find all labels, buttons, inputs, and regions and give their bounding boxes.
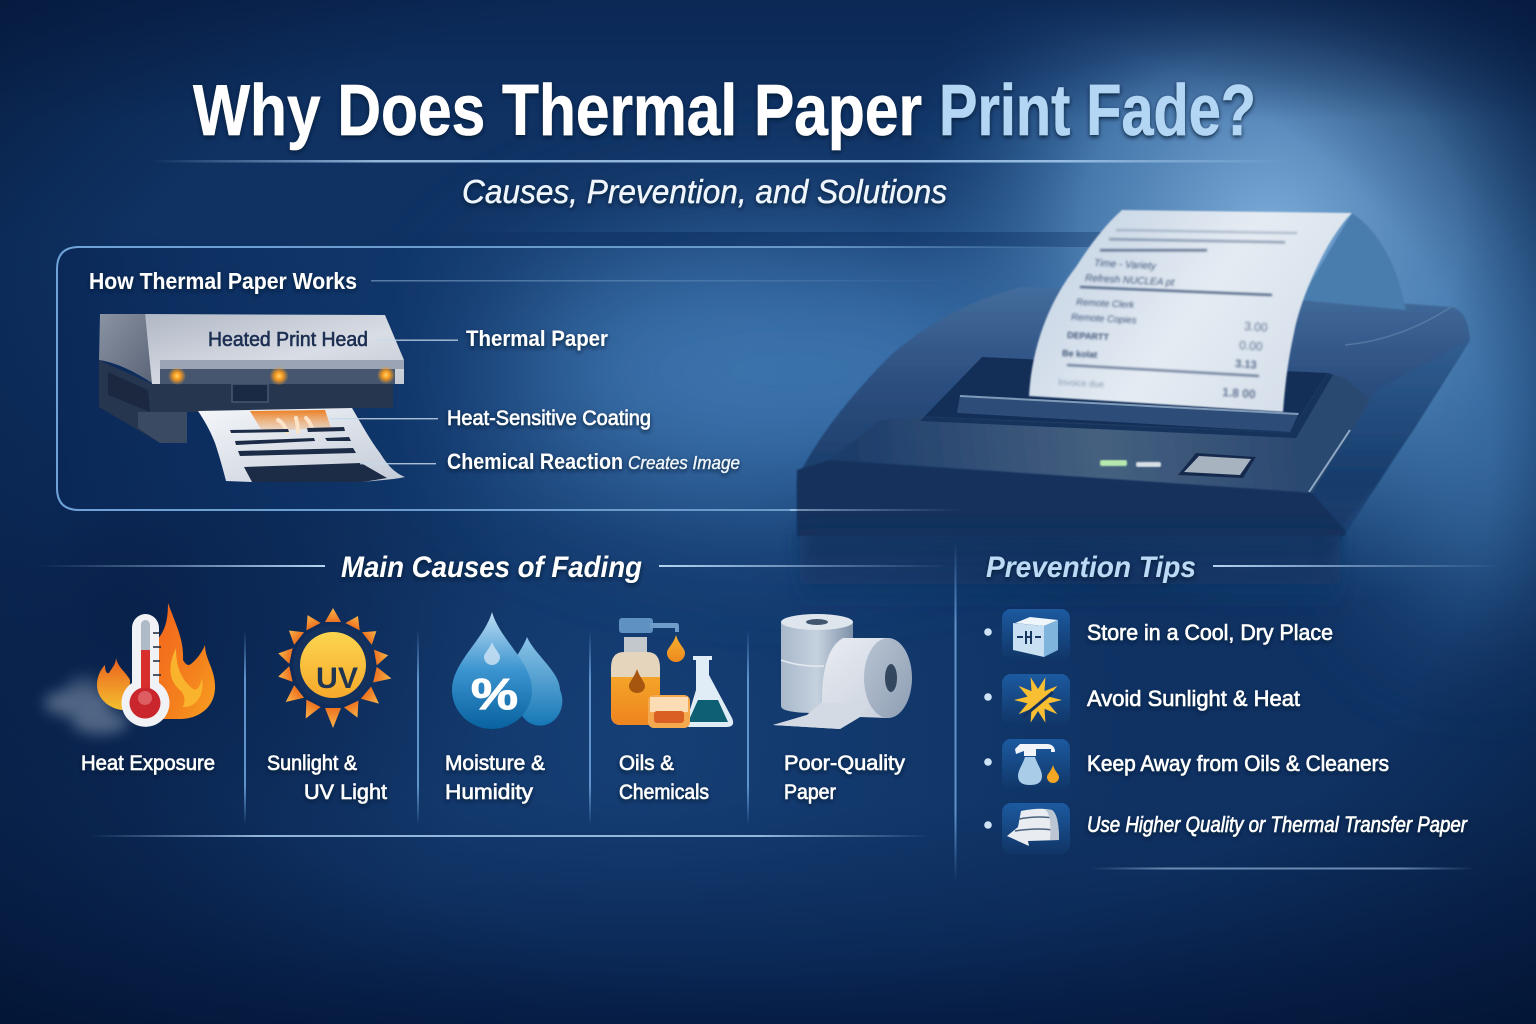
section divider (954, 540, 956, 880)
icon: back roll (781, 622, 853, 713)
receipt printed content: Refresh NUCLEA pt (1085, 273, 1176, 289)
printed lines (230, 427, 387, 482)
heading: how thermal paper works: How Thermal Paper Works (89, 268, 357, 294)
tips bottom rule (1090, 868, 1475, 870)
cause: oils and chemicals: Chemicals (619, 781, 709, 804)
label: Oils & (619, 752, 674, 775)
printer body back (797, 287, 1470, 530)
label: Moisture & (445, 752, 545, 775)
printed paper (198, 408, 405, 482)
panel: how thermal paper works frame (57, 247, 1075, 510)
label: heated print head: Heated Print Head (208, 329, 368, 351)
tip: use higher quality paper (984, 803, 1468, 854)
cause: oils and chemicals (611, 618, 733, 804)
receipt printed content (1058, 229, 1297, 401)
title: Why Does Thermal Paper (193, 71, 922, 151)
receipt printed content: Remote Clerk (1076, 297, 1136, 311)
callout: heat-sensitive coating: Heat-Sensitive Coating (447, 407, 651, 430)
tip: store cool and dry (984, 609, 1333, 661)
icon: uv sun (277, 608, 393, 728)
receipt printed content: 3.00 (1244, 319, 1268, 335)
icon: pump bottle (619, 618, 653, 633)
receipt printed content: Remote Copies (1071, 312, 1137, 326)
printer top surface (830, 373, 1370, 493)
receipt printed content: Time - Variety (1094, 258, 1157, 272)
tip: keep away from oils and cleaners (984, 739, 1389, 791)
printer right lid line (1345, 307, 1451, 345)
icon: paper stack (1002, 803, 1070, 854)
printer front face fade (800, 530, 1340, 610)
icon: water drops (509, 637, 562, 726)
label: Poor-Quality (784, 752, 906, 775)
receipt printed content: DEPARTT (1067, 330, 1110, 342)
icon: flame (157, 603, 215, 719)
receipt printed content: 1.8 00 (1222, 385, 1256, 401)
cause: poor-quality paper: Paper (784, 781, 836, 804)
label: Heat Exposure (81, 752, 215, 775)
icon: smoke (44, 676, 128, 734)
callout: chemical reaction (360, 449, 740, 474)
receipt printed content: Invoice due (1058, 377, 1104, 389)
title: Print Fade? (939, 71, 1256, 151)
receipt roll back (1300, 213, 1406, 310)
printer right side (1312, 340, 1470, 620)
diagram: heated print head (99, 314, 405, 482)
receipt printed content: 3.13 (1235, 358, 1257, 371)
receipt paper (1029, 210, 1352, 412)
printer front lip (957, 395, 1299, 432)
tip: use higher quality paper: Use Higher Quality or Thermal Transfer Paper (1087, 812, 1468, 837)
tip: store cool and dry: Store in a Cool, Dry Place (1087, 620, 1333, 645)
callout: thermal paper: Thermal Paper (466, 326, 608, 351)
icon: front roll (773, 638, 888, 729)
printer slot (924, 357, 1328, 433)
panel bottom edge over printer (790, 509, 960, 511)
print head side (99, 314, 152, 383)
heading: prevention tips: Prevention Tips (986, 551, 1196, 584)
status lights (1100, 460, 1161, 467)
cause: heat exposure (44, 603, 215, 775)
receipt printed content: Be kolat (1062, 348, 1097, 360)
tip: avoid sunlight and heat: Avoid Sunlight & Heat (1087, 686, 1300, 711)
cause: moisture and humidity: Humidity (445, 781, 534, 804)
causes bottom rule (90, 835, 930, 837)
cause: moisture and humidity: % (471, 670, 518, 719)
icon: box (1002, 609, 1070, 661)
printer photo (797, 210, 1470, 620)
icon: sun burst (1002, 674, 1070, 726)
cause: sunlight and uv light: UV Light (304, 781, 387, 804)
cause: sunlight and uv light (267, 608, 393, 804)
icon: spray bottle (1002, 739, 1070, 791)
callout: chemical reaction: Creates Image (628, 452, 740, 473)
callout: chemical reaction: Chemical Reaction (447, 449, 623, 474)
label: Sunlight & (267, 752, 357, 775)
icon: oil drop (667, 635, 685, 662)
printer button (1178, 453, 1256, 478)
icon: thermometer (122, 614, 170, 727)
heating elements (168, 366, 395, 386)
heading: main causes of fading: Main Causes of Fading (341, 551, 642, 584)
cause dividers (244, 630, 749, 825)
printer corner highlight (1309, 430, 1350, 492)
title underline (150, 160, 1290, 162)
cause: sunlight and uv light: UV (316, 662, 358, 695)
heated zone (250, 410, 331, 431)
icon: jar (648, 695, 690, 728)
print head casing (145, 314, 404, 384)
receipt printed content: 0.00 (1239, 338, 1263, 354)
tip: keep away from oils and cleaners: Keep Away from Oils & Cleaners (1087, 751, 1389, 776)
cause: poor-quality paper (773, 614, 912, 804)
icon: flask (685, 656, 733, 727)
printer front face (797, 460, 1345, 536)
cause: moisture and humidity (445, 612, 562, 804)
subtitle: Causes, Prevention, and Solutions (462, 173, 947, 210)
tip: avoid sunlight and heat (984, 674, 1300, 726)
print head lower body (99, 360, 393, 443)
